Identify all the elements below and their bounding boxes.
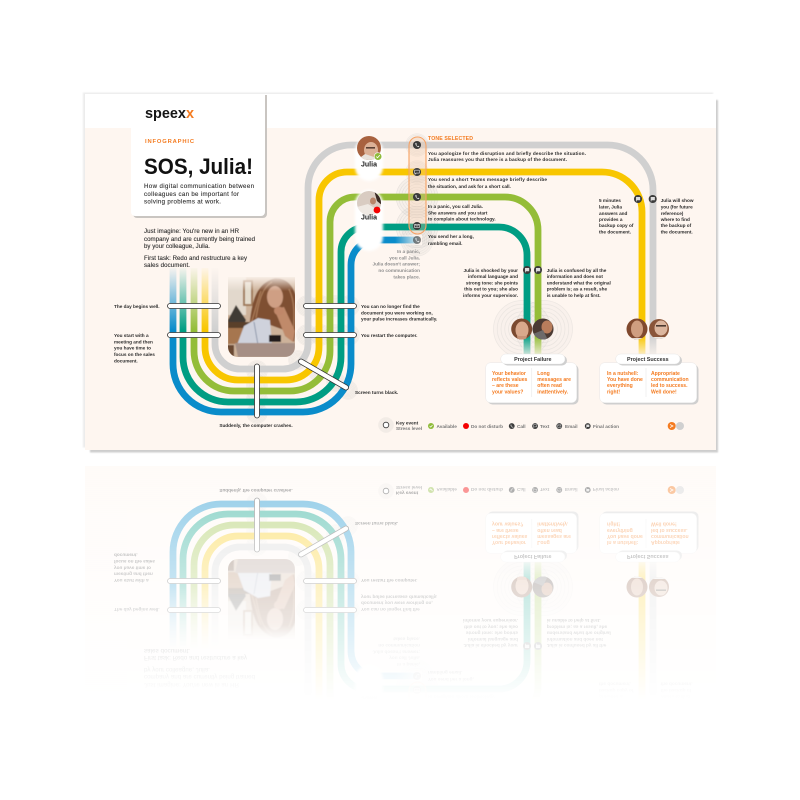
text: backup copy outcome: later, Julia (599, 204, 622, 209)
card: project failure: Long (537, 371, 550, 377)
legend: Call (517, 424, 526, 429)
text: shocked outcome: informs your supervisor. (463, 293, 518, 298)
track: teal (183, 227, 527, 402)
title card: solving problems at work. (144, 198, 221, 206)
text: option apologize: You apologize for the disruption and briefly describe the situation. (428, 151, 586, 156)
card: project failure: often read (537, 383, 562, 389)
card: project success (600, 363, 698, 404)
event labels (114, 304, 437, 428)
title card: speexx (145, 106, 194, 122)
avatar: Julia do not disturb: Julia (361, 214, 377, 222)
legend: Final action (593, 424, 619, 429)
text: option Teams message: You send a short Teams message briefly describe (428, 177, 547, 182)
card: project failure: messages are (537, 377, 571, 383)
avatar: Julia do not disturb (355, 190, 383, 251)
legend: Do not disturb (471, 424, 503, 429)
text: option email (428, 234, 474, 246)
text: future reference outcome: where to find (660, 217, 690, 222)
event labels: document. (114, 358, 138, 363)
legend: Stress level (396, 426, 422, 431)
event labels: You restart the computer. (361, 333, 417, 338)
event labels: your pulse increases dramatically. (361, 317, 437, 322)
text: future reference outcome: the backup of (661, 223, 692, 228)
label: project failure: Project Failure (514, 357, 552, 363)
event labels: You start with a (114, 333, 149, 338)
text: future reference outcome (660, 198, 694, 234)
text: backup copy outcome: answers and (599, 211, 628, 216)
intro text (144, 228, 255, 269)
avatar: Julia available (355, 134, 383, 181)
highlight: tone selected (409, 136, 473, 234)
text: option Teams message: the situation, and ask for a short call. (428, 184, 511, 189)
text: shocked outcome: strong tone: she points (466, 280, 518, 285)
text: shocked outcome (463, 268, 518, 298)
text: option call: She answers and you start (428, 210, 488, 215)
text: option apologize: Julia reassures you that there is a backup of the document. (428, 157, 567, 162)
infographic page with reflection (85, 94, 716, 683)
text: confused outcome: is unable to help at first. (547, 293, 601, 298)
event labels: Suddenly, the computer crashes. (219, 423, 293, 428)
card: project failure: reflects values (492, 377, 528, 383)
title card: SOS, Julia! (144, 154, 253, 179)
text: no answer: In a panic, (397, 249, 420, 254)
event labels: focus on the sales (114, 352, 155, 357)
title card: How digital communication between (144, 183, 254, 190)
text: confused outcome (547, 268, 611, 298)
event labels: meeting and then (114, 339, 153, 344)
card: project success: everything (607, 383, 633, 389)
text: backup copy outcome: provides a (599, 217, 623, 222)
card: project failure: Your behavior (492, 371, 526, 377)
event labels: You can no longer find the (361, 304, 420, 309)
legend: Text (540, 424, 550, 429)
text: backup copy outcome: 5 minutes (599, 198, 621, 203)
track: gray (215, 145, 653, 369)
text: future reference outcome: Julia will show (661, 198, 694, 203)
panel shadow (83, 92, 718, 453)
title card (131, 95, 267, 218)
card: project success: led to success. (651, 383, 688, 389)
card: project failure (486, 363, 578, 404)
text: future reference outcome: you (for future (661, 204, 693, 209)
text: no answer: you call Julia. (389, 255, 420, 260)
legend: Key event (396, 420, 419, 426)
intro text: by your colleague, Julia. (144, 243, 210, 250)
event labels: Screen turns black. (355, 390, 398, 395)
highlight: tone selected: TONE SELECTED (428, 136, 473, 142)
card: project failure: – are these (492, 383, 519, 389)
avatars: project failure (510, 317, 556, 342)
track: lime (194, 197, 538, 391)
card: project success: You have done (607, 377, 643, 383)
photo: woman at laptop (226, 275, 298, 359)
avatar: Julia available: Julia (361, 162, 377, 168)
event bars (168, 304, 356, 418)
final action icons (523, 195, 657, 274)
panel: main card (85, 94, 716, 450)
track fades (168, 235, 657, 357)
title card: colleagues can be important for (144, 191, 239, 198)
text: shocked outcome: this out to you; she also (464, 287, 518, 292)
text: option call (428, 204, 496, 222)
intro text: sales document. (144, 262, 190, 269)
legend (378, 417, 619, 433)
text: confused outcome: problem is; as a result, she (547, 287, 608, 292)
text: backup copy outcome: backup copy of (599, 223, 634, 228)
text: option email: You send her a long, (428, 234, 474, 239)
intro text: Just imagine: You're new in an HR (144, 228, 240, 235)
text: option call: to complain about technology. (428, 216, 496, 222)
toggle icon (668, 422, 684, 430)
label: project success: Project Success (627, 357, 669, 363)
text: backup copy outcome: the document. (599, 230, 631, 234)
text: no answer: no communication (378, 268, 420, 273)
text: shocked outcome: Julia is shocked by your (464, 268, 518, 273)
event labels: document you were working on, (361, 310, 433, 315)
text: confused outcome: Julia is confused by all the (547, 268, 607, 273)
label: project failure (501, 354, 567, 366)
card: project failure: inattentively. (537, 389, 569, 395)
text: option call: In a panic, you call Julia. (428, 204, 483, 209)
card: project success: Appropriate (651, 371, 680, 377)
text: option Teams message (428, 177, 547, 189)
text: confused outcome: understand what the original (547, 280, 611, 285)
card: project success: right! (607, 389, 620, 395)
legend: Available (436, 424, 457, 429)
text: shocked outcome: informal language and (468, 274, 518, 279)
text: confused outcome: information and does not (547, 274, 603, 279)
text: future reference outcome: reference) (661, 211, 684, 216)
legend: Email (565, 424, 578, 429)
text: backup copy outcome (599, 198, 634, 234)
card: project success: Well done! (651, 389, 677, 395)
label: project success (616, 354, 682, 366)
track: yellow (205, 172, 642, 380)
event labels: The day begins well. (114, 304, 160, 309)
title card: INFOGRAPHIC (145, 139, 195, 145)
card: project success: communication (651, 377, 689, 383)
card: project success: In a nutshell: (607, 371, 639, 377)
text: no answer: Julia doesn't answer; (373, 262, 420, 267)
text: future reference outcome: the document. (661, 230, 693, 234)
card: project failure: your values? (492, 389, 523, 395)
text: option apologize (428, 151, 586, 162)
avatars: project success (626, 317, 672, 341)
intro text: company and are currently being trained (144, 236, 255, 243)
stress level ripples on tracks (247, 134, 573, 423)
event labels: you have time to (114, 346, 151, 350)
text: no answer: takes place. (393, 274, 420, 279)
text: option email: rambling email. (428, 241, 462, 246)
text: no answer (373, 249, 420, 279)
tone icons (413, 141, 421, 244)
intro text: First task: Redo and restructure a key (144, 255, 248, 262)
track: blue (173, 240, 420, 412)
